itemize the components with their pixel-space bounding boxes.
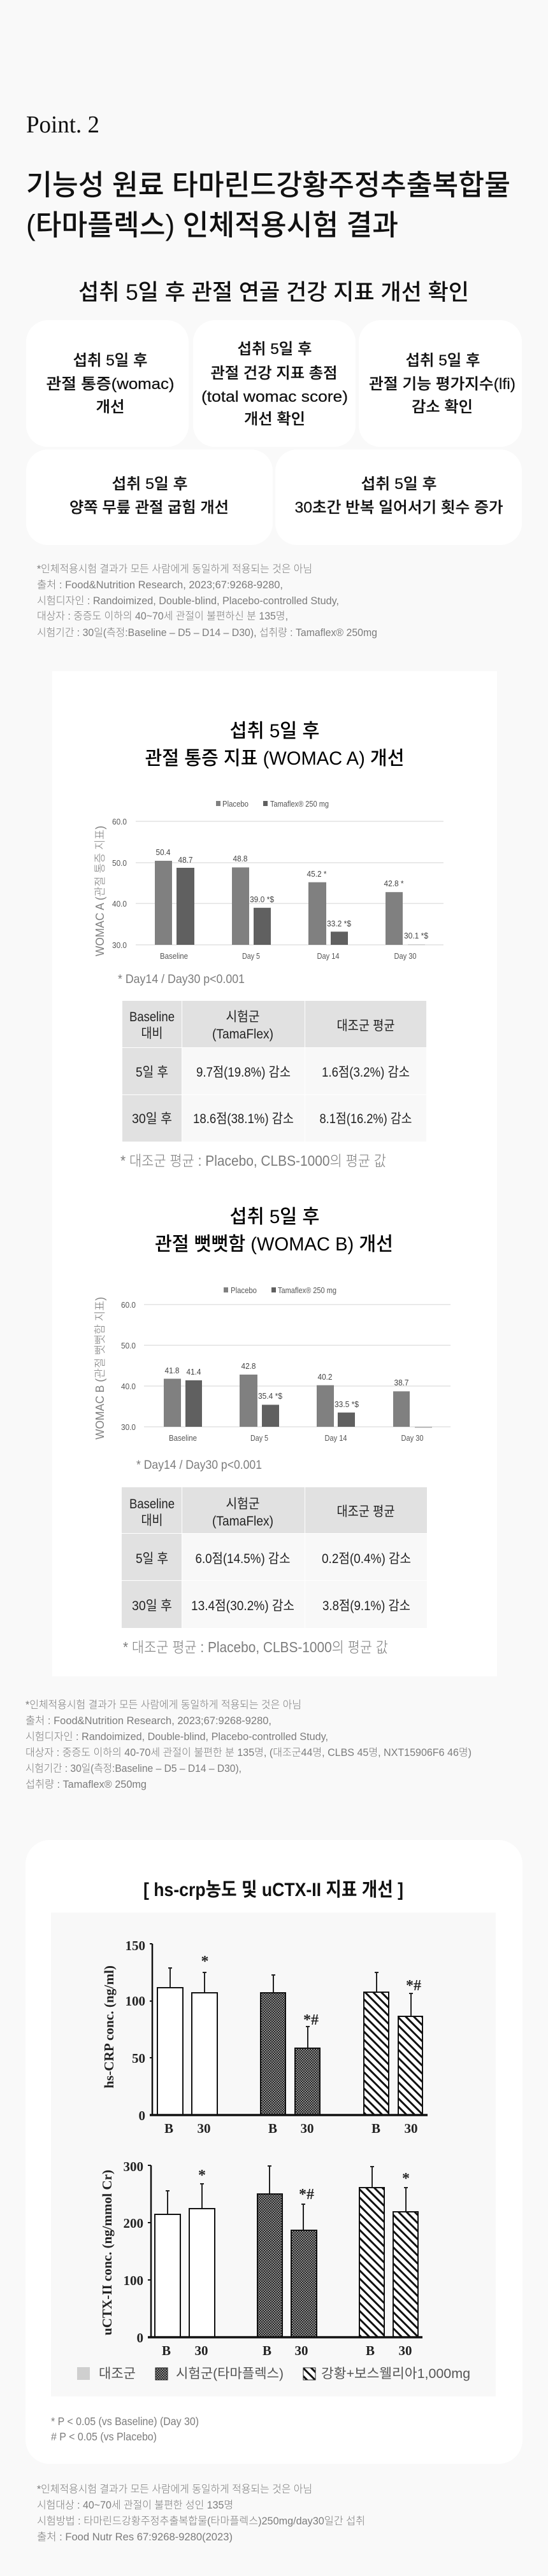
x axis labels: 30: [198, 2121, 210, 2136]
footnote: study summary: [37, 563, 377, 639]
significance marks: [198, 2167, 410, 2203]
x axis labels: [160, 951, 417, 961]
table: WOMAC A: [122, 1001, 426, 1142]
heading: WOMAC A: 섭취 5일 후: [229, 721, 320, 742]
main title: (타마플렉스) 인체적용시험 결과: [26, 209, 398, 241]
significance marks: *#: [406, 1978, 421, 1994]
bar chart: uCTX-II: [99, 2159, 422, 2358]
footnote: biomarker study: 출처 : Food Nutr Res 67:9268-9280(2023): [37, 2531, 233, 2543]
table: WOMAC B: Baseline: [129, 1497, 175, 1511]
x axis labels: B: [268, 2121, 277, 2136]
x axis labels: 30: [399, 2343, 412, 2358]
x axis labels: Day 30: [394, 951, 417, 961]
table: WOMAC B: 대조군 평균: [336, 1504, 395, 1519]
value labels: 50.4: [155, 847, 171, 857]
card: lfi: 감소 확인: [412, 399, 473, 416]
panel background: [25, 1840, 523, 2464]
significance marks: *#: [299, 2186, 314, 2203]
legend: [224, 1285, 336, 1295]
y axis ticks: [124, 2159, 143, 2346]
x axis labels: [169, 1433, 423, 1443]
error bars: [168, 1968, 413, 2048]
x axis labels: Day 14: [325, 1433, 347, 1443]
footnote: study summary: 대상자 : 중증도 이하의 40~70세 관절이 불편하신 분 135명,: [37, 610, 288, 622]
bar chart: WOMAC A: [94, 799, 443, 961]
significance marks: *#: [303, 2012, 319, 2028]
table: WOMAC B: 30일 후: [132, 1599, 172, 1613]
significance marks: [201, 1953, 421, 2028]
error bars: [166, 2166, 408, 2230]
footnote: biomarker study: 시험방법 : 타마린드강황주정추출복합물(타마플렉스)250mg/day30일간 섭취: [37, 2515, 365, 2527]
x axis labels: Day 5: [250, 1433, 268, 1443]
main title: 기능성 원료 타마린드강황주정추출복합물: [26, 169, 510, 201]
table: WOMAC A: 시험군: [226, 1010, 260, 1024]
x axis labels: 30: [301, 2121, 314, 2136]
x axis labels: B: [263, 2343, 271, 2358]
legend: [216, 799, 329, 809]
y axis ticks: [121, 1300, 136, 1432]
table: WOMAC B: 5일 후: [136, 1552, 168, 1566]
card: lfi: 섭취 5일 후: [405, 352, 480, 369]
table: WOMAC B: 3.8점(9.1%) 감소: [322, 1599, 410, 1613]
x axis labels: Day 5: [242, 951, 260, 961]
card: total womac score: (total womac score): [201, 388, 348, 406]
panel: hs-crp and uCTX-II: [25, 1840, 523, 2464]
footnote: WOMAC study: *인체적용시험 결과가 모든 사람에게 동일하게 적용되는 것은 아님: [25, 1699, 301, 1711]
value labels: 42.8: [241, 1361, 256, 1371]
table: WOMAC A: 대조군 평균: [336, 1019, 395, 1033]
bars: [155, 861, 425, 945]
value labels: 48.8: [233, 854, 247, 863]
card: total womac score: [193, 320, 356, 447]
footnote: WOMAC study: 출처 : Food&Nutrition Research, 2023;67:9268-9280,: [25, 1715, 271, 1727]
significance key: [51, 2415, 199, 2443]
heading: WOMAC A: 관절 통증 지표 (WOMAC A) 개선: [145, 748, 404, 769]
footnote: study summary: *인체적용시험 결과가 모든 사람에게 동일하게 적용되는 것은 아님: [37, 563, 312, 575]
table: WOMAC B: [122, 1487, 427, 1628]
value labels: [155, 847, 429, 940]
legend: Tamaflex® 250 mg: [270, 799, 329, 809]
y axis ticks: 60.0: [112, 817, 127, 826]
x axis labels: B: [164, 2121, 173, 2136]
footnote: WOMAC study: 대상자 : 중증도 이하의 40-70세 관절이 불편한 분 135명, (대조군44명, CLBS 45명, NXT15906F6 46명): [25, 1746, 472, 1759]
y axis ticks: 200: [124, 2216, 143, 2231]
card: womac pain: 섭취 5일 후: [73, 352, 148, 369]
table: WOMAC B: 13.4점(30.2%) 감소: [191, 1599, 294, 1613]
card: total womac score: 개선 확인: [244, 411, 305, 428]
y axis ticks: 300: [124, 2159, 143, 2174]
control group note A: * 대조군 평균 : Placebo, CLBS-1000의 평균 값: [120, 1152, 386, 1169]
y axis title: WOMAC B (관절 뻣뻣함 지표): [94, 1297, 106, 1440]
y axis ticks: 100: [124, 2273, 143, 2288]
value labels: 39.0 *$: [250, 895, 275, 904]
bars: [155, 2188, 418, 2337]
table: WOMAC A: 5일 후: [136, 1065, 168, 1080]
bar chart: hs-CRP: [101, 1938, 428, 2136]
significance key: * P < 0.05 (vs Baseline) (Day 30): [51, 2415, 199, 2428]
y axis ticks: 40.0: [121, 1382, 136, 1391]
table: WOMAC B: 대비: [141, 1513, 163, 1528]
significance marks: *: [201, 1953, 209, 1970]
card: knee flexion: 섭취 5일 후: [112, 476, 187, 493]
value labels: 41.8: [164, 1366, 180, 1375]
card: womac pain: 개선: [96, 399, 125, 416]
heading: WOMAC B: [155, 1207, 393, 1255]
chart legend: 강황+보스웰리아1,000mg: [321, 2367, 470, 2381]
legend: Tamaflex® 250 mg: [278, 1285, 336, 1295]
table: WOMAC B: 시험군: [226, 1497, 260, 1511]
y axis ticks: 50: [132, 2051, 145, 2066]
x axis labels: 30: [404, 2121, 418, 2136]
value labels: 30.1 *$: [404, 931, 429, 940]
value labels: 48.7: [178, 855, 192, 865]
panel background: [52, 671, 497, 1676]
heading: WOMAC B: 관절 뻣뻣함 (WOMAC B) 개선: [155, 1234, 393, 1255]
y axis ticks: 0: [139, 2108, 145, 2123]
footnote: WOMAC study: 섭취량 : Tamaflex® 250mg: [25, 1778, 147, 1790]
chart legend: [77, 2367, 470, 2381]
x axis labels: B: [366, 2343, 375, 2358]
card: womac pain: 관절 통증(womac): [46, 376, 175, 393]
axes: [148, 2165, 422, 2337]
y axis ticks: 50.0: [121, 1341, 136, 1350]
x axis labels: B: [371, 2121, 380, 2136]
significance marks: *: [198, 2167, 206, 2184]
footnote: WOMAC study: [25, 1699, 472, 1790]
footnote: study summary: 시험기간 : 30일(측정:Baseline – D5 – D14 – D30), 섭취량 : Tamaflex® 250mg: [37, 626, 377, 639]
y axis title: uCTX-II conc. (ng/mmol Cr): [99, 2170, 115, 2335]
legend: Placebo: [231, 1285, 257, 1295]
footnote: study summary: 출처 : Food&Nutrition Research, 2023;67:9268-9280,: [37, 579, 283, 591]
heading: WOMAC A: [145, 721, 404, 769]
table: WOMAC A: 30일 후: [132, 1112, 172, 1126]
significance note B: * Day14 / Day30 p<0.001: [136, 1458, 262, 1472]
x axis labels: Baseline: [160, 951, 188, 961]
panel heading: [ hs-crp농도 및 uCTX-II 지표 개선 ]: [143, 1879, 403, 1900]
legend: Placebo: [222, 799, 249, 809]
axes: [150, 1944, 428, 2115]
y axis ticks: 100: [125, 1993, 145, 2009]
panel: benefit cards: [26, 320, 522, 545]
x axis labels: [162, 2343, 412, 2358]
main title: [26, 169, 510, 241]
card: chair stand: [275, 449, 522, 545]
footnote: biomarker study: [37, 2483, 365, 2543]
section heading: 섭취 5일 후 관절 연골 건강 지표 개선 확인: [78, 280, 469, 305]
card: chair stand: 30초간 반복 일어서기 횟수 증가: [294, 499, 503, 516]
bars: [157, 1988, 422, 2115]
value labels: 41.4: [186, 1367, 201, 1376]
table: WOMAC B: 6.0점(14.5%) 감소: [195, 1552, 291, 1566]
significance marks: *: [402, 2170, 410, 2187]
x axis labels: 30: [294, 2343, 308, 2358]
footnote: WOMAC study: 시험기간 : 30일(측정:Baseline – D5 – D14 – D30),: [25, 1762, 242, 1774]
y axis ticks: 60.0: [121, 1300, 136, 1310]
x axis labels: [164, 2121, 418, 2136]
x axis labels: 30: [195, 2343, 208, 2358]
y axis title: WOMAC A (관절 통증 지표): [94, 826, 106, 956]
value labels: 33.2 *$: [327, 919, 352, 928]
table: WOMAC A: 대비: [141, 1026, 163, 1041]
point label: Point. 2: [26, 111, 99, 138]
chart legend: 시험군(타마플렉스): [176, 2367, 284, 2381]
table: WOMAC A: Baseline: [129, 1010, 175, 1024]
y axis ticks: 30.0: [121, 1422, 136, 1432]
bar chart: WOMAC B: [94, 1285, 451, 1443]
control group note B: * 대조군 평균 : Placebo, CLBS-1000의 평균 값: [123, 1639, 388, 1655]
value labels: [164, 1361, 409, 1409]
value labels: 38.7: [394, 1378, 409, 1387]
table: WOMAC B: (TamaFlex): [212, 1514, 273, 1529]
card: knee flexion: 양쪽 무릎 관절 굽힘 개선: [69, 499, 229, 516]
value labels: 35.4 *$: [258, 1391, 283, 1401]
value labels: 40.2: [317, 1372, 333, 1382]
x axis labels: B: [162, 2343, 171, 2358]
significance key: # P < 0.05 (vs Placebo): [51, 2430, 157, 2443]
chart background: [51, 1913, 496, 2396]
table: WOMAC A: 8.1점(16.2%) 감소: [320, 1112, 412, 1126]
value labels: 33.5 *$: [335, 1399, 359, 1409]
footnote: WOMAC study: 시험디자인 : Randoimized, Double-blind, Placebo-controlled Study,: [25, 1730, 328, 1743]
panel: WOMAC results: [52, 671, 497, 1676]
card: knee flexion: [26, 449, 273, 545]
value labels: 45.2 *: [307, 869, 326, 879]
significance note A: * Day14 / Day30 p<0.001: [118, 972, 245, 986]
y axis title: hs-CRP conc. (ng/ml): [101, 1965, 117, 2088]
footnote: study summary: 시험디자인 : Randoimized, Double-blind, Placebo-controlled Study,: [37, 595, 339, 607]
card: lfi: 관절 기능 평가지수(lfi): [369, 376, 516, 393]
card: lfi: [359, 320, 522, 447]
y axis ticks: 30.0: [112, 940, 127, 950]
card: chair stand: 섭취 5일 후: [361, 476, 437, 493]
footnote: biomarker study: *인체적용시험 결과가 모든 사람에게 동일하게 적용되는 것은 아님: [37, 2483, 312, 2495]
card: womac pain: [26, 320, 189, 447]
x axis labels: Day 14: [317, 951, 339, 961]
heading: WOMAC B: 섭취 5일 후: [229, 1207, 320, 1228]
footnote: biomarker study: 시험대상 : 40~70세 관절이 불편한 성인 135명: [37, 2499, 233, 2511]
bars: [164, 1375, 432, 1427]
table: WOMAC A: 18.6점(38.1%) 감소: [193, 1112, 294, 1126]
card: total womac score: 관절 건강 지표 총점: [210, 365, 338, 382]
table: WOMAC B: 0.2점(0.4%) 감소: [322, 1552, 411, 1566]
chart legend: 대조군: [99, 2367, 136, 2381]
y axis ticks: [112, 817, 127, 950]
card: total womac score: 섭취 5일 후: [237, 341, 312, 358]
y axis ticks: 50.0: [112, 858, 127, 868]
y axis ticks: 0: [136, 2330, 143, 2346]
y axis ticks: 150: [125, 1938, 145, 1953]
value labels: 42.8 *: [384, 879, 404, 888]
x axis labels: Baseline: [169, 1433, 197, 1443]
y axis ticks: [125, 1938, 145, 2123]
table: WOMAC A: 1.6점(3.2%) 감소: [322, 1065, 410, 1080]
y axis ticks: 40.0: [112, 899, 127, 909]
x axis labels: Day 30: [401, 1433, 423, 1443]
table: WOMAC A: 9.7점(19.8%) 감소: [196, 1065, 291, 1080]
table: WOMAC A: (TamaFlex): [212, 1027, 273, 1042]
